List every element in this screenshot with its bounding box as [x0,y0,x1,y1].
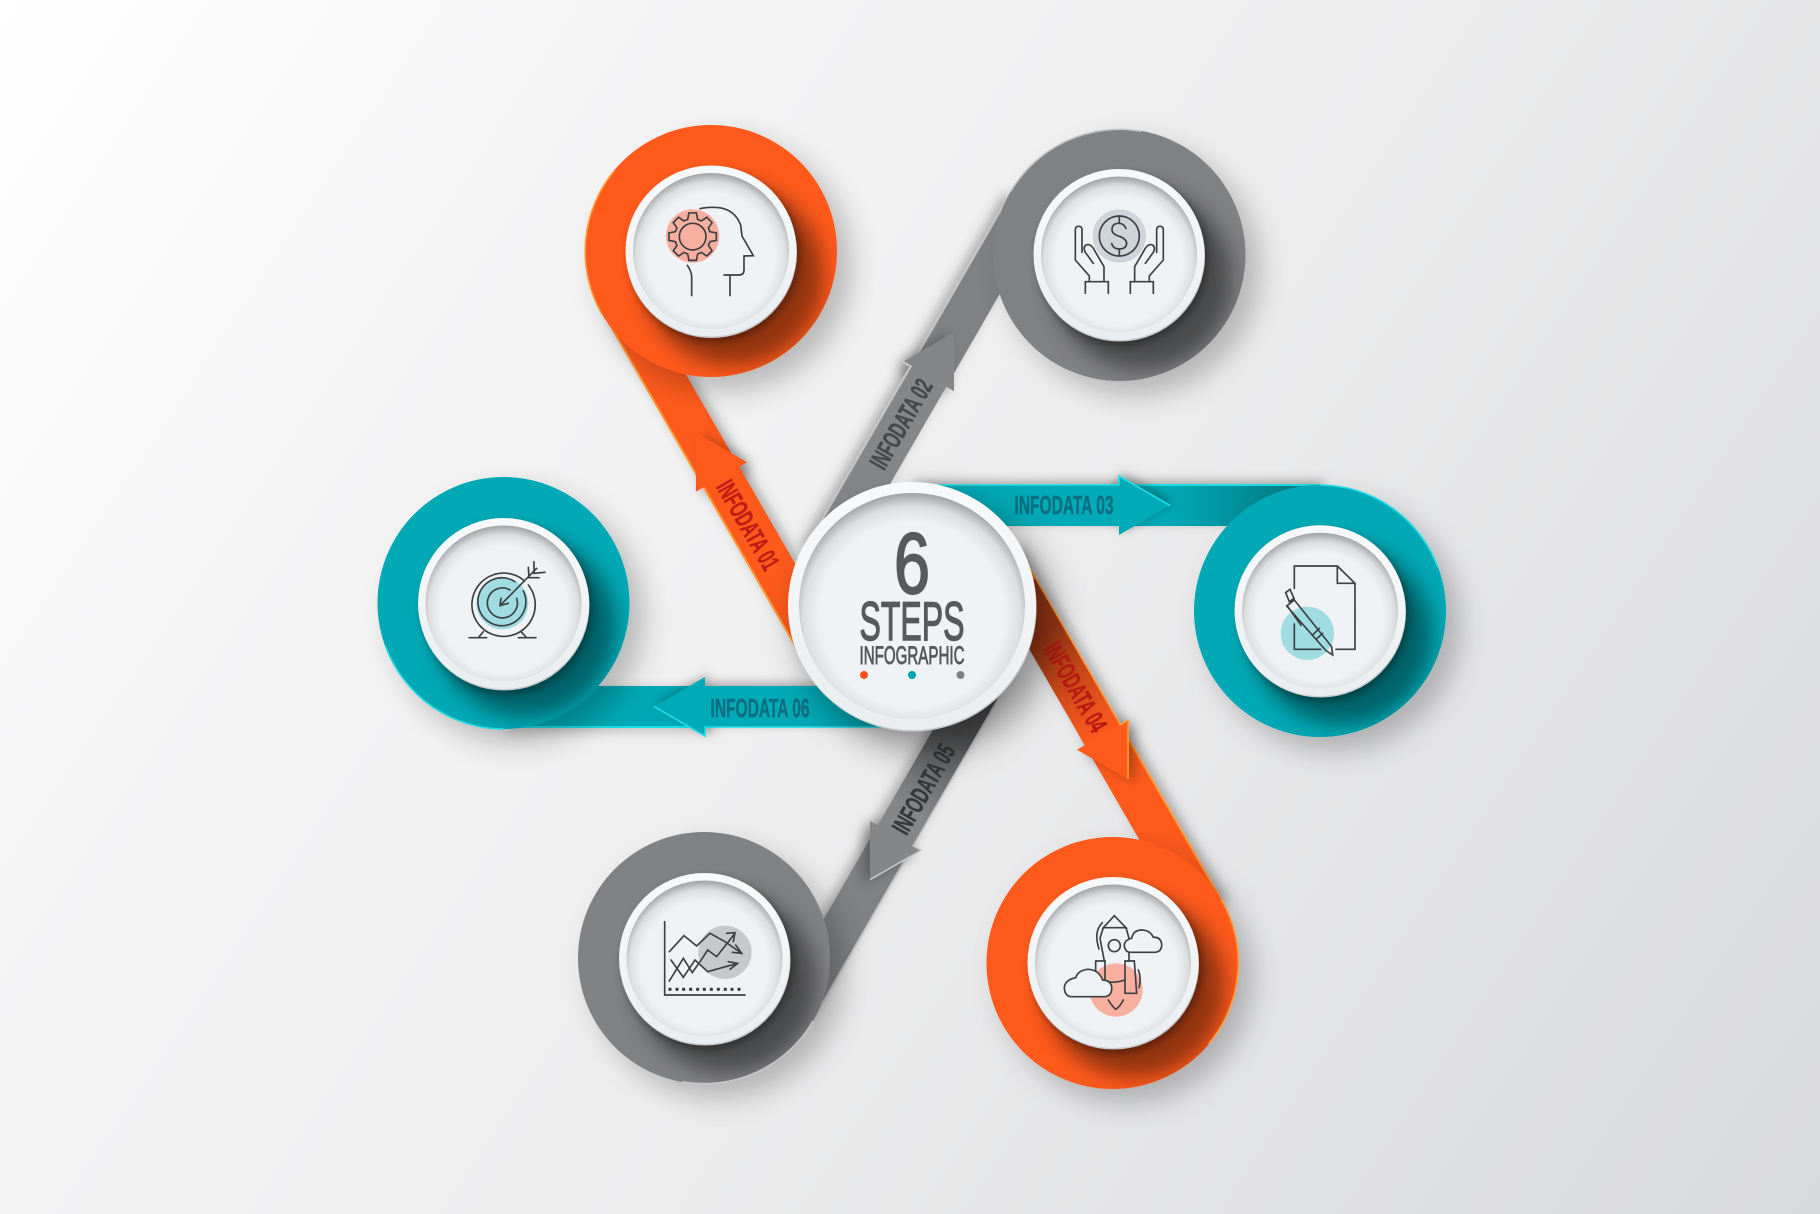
step 4: orange ring [986,837,1281,1089]
step 3: teal ring [1194,485,1446,737]
step 6: teal ring [378,477,630,729]
ribbon: infodata 06: INFODATA 06 [711,693,809,723]
ribbon: infodata 04 [973,541,1221,919]
heading: 6: 6 [894,516,930,612]
icon: rocket and clouds [1064,916,1162,1017]
ribbon: infodata 02: INFODATA 02 [863,374,939,474]
ribbon: infodata 03: INFODATA 03 [1015,490,1113,520]
icon: chart with arrows [665,922,752,995]
icon: hands holding coin [1075,209,1163,293]
subheading: infographic: INFOGRAPHIC [860,642,964,670]
heading: steps: STEPS [860,590,964,652]
step 2: grey ring [994,90,1246,381]
icon: head with gear [666,207,753,296]
step 1: orange ring [543,125,837,377]
ribbon: infodata 05 [777,642,1025,1020]
ribbon: infodata 05: INFODATA 05 [886,739,961,839]
center disc [788,482,1036,732]
ribbon: infodata 06 [504,677,912,736]
three coloured dots [860,671,964,679]
ribbon: infodata 04: INFODATA 04 [1038,637,1113,738]
ribbon: infodata 01: INFODATA 01 [710,475,786,575]
ribbon: infodata 03 [912,476,1320,535]
ribbon: infodata 02 [799,192,1047,571]
ribbon: infodata 01 [603,293,851,671]
step 5: grey ring [578,832,830,1123]
icon: document and pen [1281,566,1355,660]
icon: target with arrow [469,562,545,638]
